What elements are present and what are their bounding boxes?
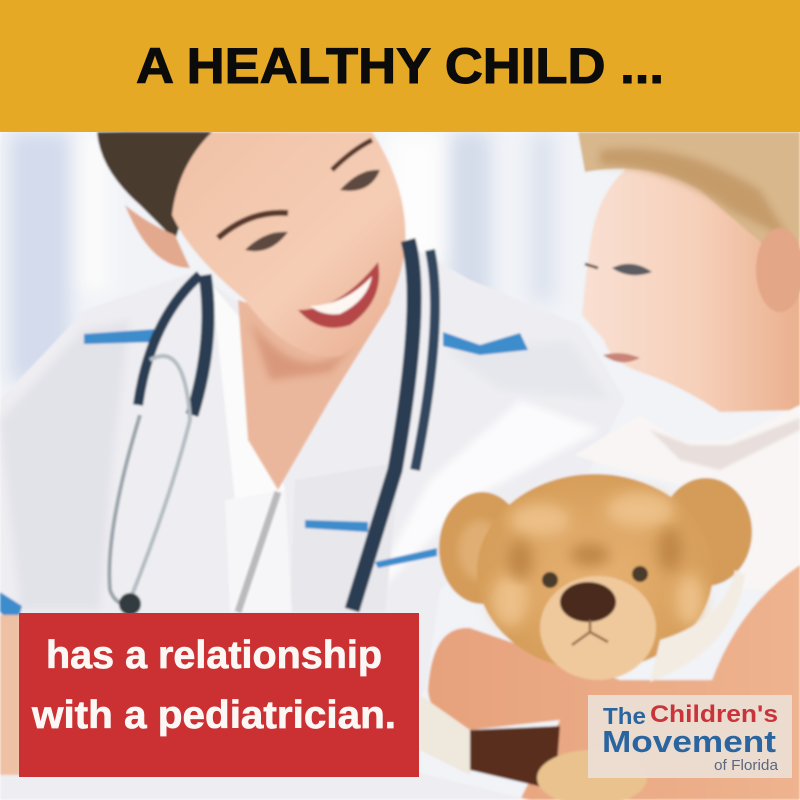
doctor hand (0, 615, 20, 775)
child ear (756, 228, 800, 312)
child eye and mouth (612, 264, 652, 275)
stethoscope (109, 240, 435, 610)
doctor face (172, 132, 406, 357)
logo: The Children's Movement of Florida: The (603, 703, 646, 729)
logo: The Children's Movement of Florida (588, 695, 792, 778)
table and paper (0, 773, 530, 800)
title: A HEALTHY CHILD ... (136, 38, 664, 94)
doctor neck (238, 300, 392, 490)
doctor eyes, brows and smile (218, 213, 288, 238)
coat blue trim (84, 329, 157, 344)
child arm (428, 565, 800, 800)
logo: The Children's Movement of Florida: of Florida (714, 757, 779, 774)
teddy bear (420, 474, 752, 800)
child face (582, 150, 800, 412)
doctor hair (97, 132, 235, 240)
caption text: with a pediatrician. (31, 694, 396, 737)
logo: The Children's Movement of Florida: Movement (602, 724, 776, 759)
child hair (578, 132, 800, 275)
child dress (575, 405, 800, 590)
caption text (31, 634, 396, 737)
logo: The Children's Movement of Florida: Children's (650, 701, 778, 728)
doctor ear (125, 205, 190, 268)
caption text: has a relationship (46, 634, 382, 677)
coat zip (238, 492, 278, 612)
doctor coat (0, 240, 625, 800)
top banner (0, 0, 800, 132)
red caption box (19, 613, 419, 777)
